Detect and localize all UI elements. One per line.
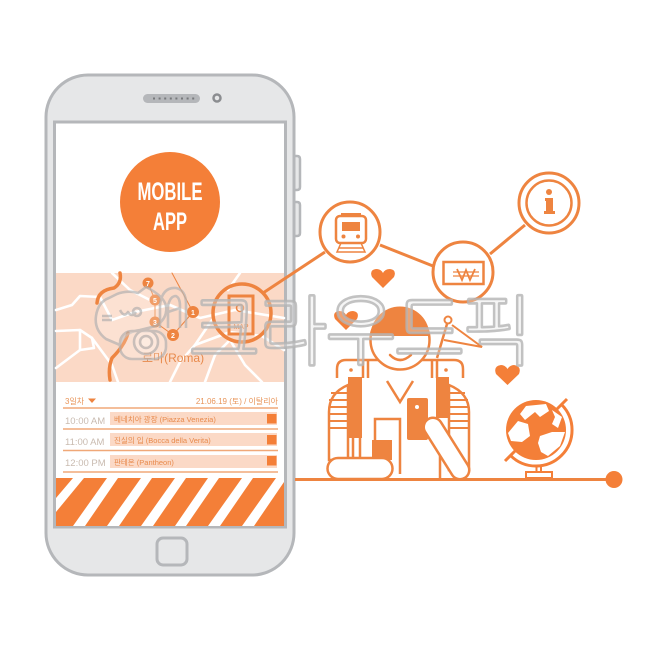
schedule header bbox=[65, 396, 279, 406]
heart 1 bbox=[371, 269, 395, 288]
shoulder straps bbox=[348, 377, 449, 438]
row 2: 진실의 입 (Bocca della Verita) bbox=[114, 435, 211, 445]
phone bbox=[46, 75, 300, 575]
row 1 bbox=[65, 412, 277, 427]
icon: train bbox=[320, 202, 380, 262]
continents bbox=[508, 404, 565, 456]
phone side buttons bbox=[294, 156, 300, 236]
screen bbox=[54, 122, 286, 527]
route pins: 7 bbox=[146, 281, 150, 288]
ground line bbox=[295, 471, 622, 488]
traveller figure bbox=[328, 306, 482, 479]
row 3 bbox=[65, 455, 277, 469]
schedule header: 21.06.19 (토) / 이탈리아 bbox=[196, 396, 279, 406]
forearm bbox=[328, 458, 392, 479]
network line bbox=[263, 225, 525, 293]
mobile app badge: MOBILE bbox=[138, 178, 202, 206]
route pins bbox=[142, 278, 199, 341]
route pins: 1 bbox=[191, 310, 195, 317]
heart 2 bbox=[334, 311, 358, 330]
head bbox=[370, 306, 430, 370]
map roads bbox=[56, 273, 284, 382]
watermark logo bbox=[96, 287, 186, 359]
flag bbox=[437, 316, 482, 358]
icon: won note bbox=[433, 242, 493, 302]
icon: map bbox=[213, 284, 271, 342]
phone body bbox=[46, 75, 294, 575]
row 3: 12:00 PM bbox=[65, 458, 106, 469]
city label: 로마(Roma) bbox=[142, 351, 204, 365]
speaker bbox=[143, 94, 200, 103]
route pins: 5 bbox=[153, 298, 157, 305]
striped sleeves bbox=[329, 385, 469, 470]
row 1: 베네치아 광장 (Piazza Venezia) bbox=[114, 414, 216, 424]
torso bbox=[361, 378, 437, 478]
schedule bbox=[63, 396, 279, 472]
map panel bbox=[56, 273, 284, 382]
handheld phone bbox=[407, 398, 428, 440]
schedule header: 3일차 bbox=[65, 397, 85, 406]
route pins: 3 bbox=[153, 320, 157, 327]
row 2 bbox=[65, 433, 277, 448]
watermark bbox=[96, 287, 532, 369]
mobile app badge: APP bbox=[153, 208, 187, 236]
leg lines bbox=[353, 438, 440, 478]
icon: information bbox=[519, 173, 579, 233]
route pins: 2 bbox=[171, 333, 175, 340]
row 2: 11:00 AM bbox=[65, 437, 105, 448]
home button bbox=[157, 538, 187, 565]
camera lens bbox=[214, 94, 220, 102]
watermark wordmark: 크라우드픽 bbox=[190, 293, 532, 369]
mobile app badge bbox=[120, 152, 220, 252]
backpack bbox=[337, 360, 463, 378]
arm bbox=[433, 427, 460, 470]
route bbox=[97, 273, 193, 380]
row 3: 판테온 (Pantheon) bbox=[114, 458, 174, 467]
icon: map: MAP bbox=[233, 324, 249, 331]
globe stand bbox=[536, 466, 541, 472]
icon: globe bbox=[505, 399, 572, 478]
schedule dividers bbox=[63, 408, 278, 472]
book bbox=[372, 419, 400, 474]
collar bbox=[387, 381, 413, 402]
globe axis and arc bbox=[505, 399, 572, 466]
row 1: 10:00 AM bbox=[65, 416, 105, 427]
heart 3 bbox=[495, 365, 520, 385]
striped banner bbox=[56, 478, 284, 526]
